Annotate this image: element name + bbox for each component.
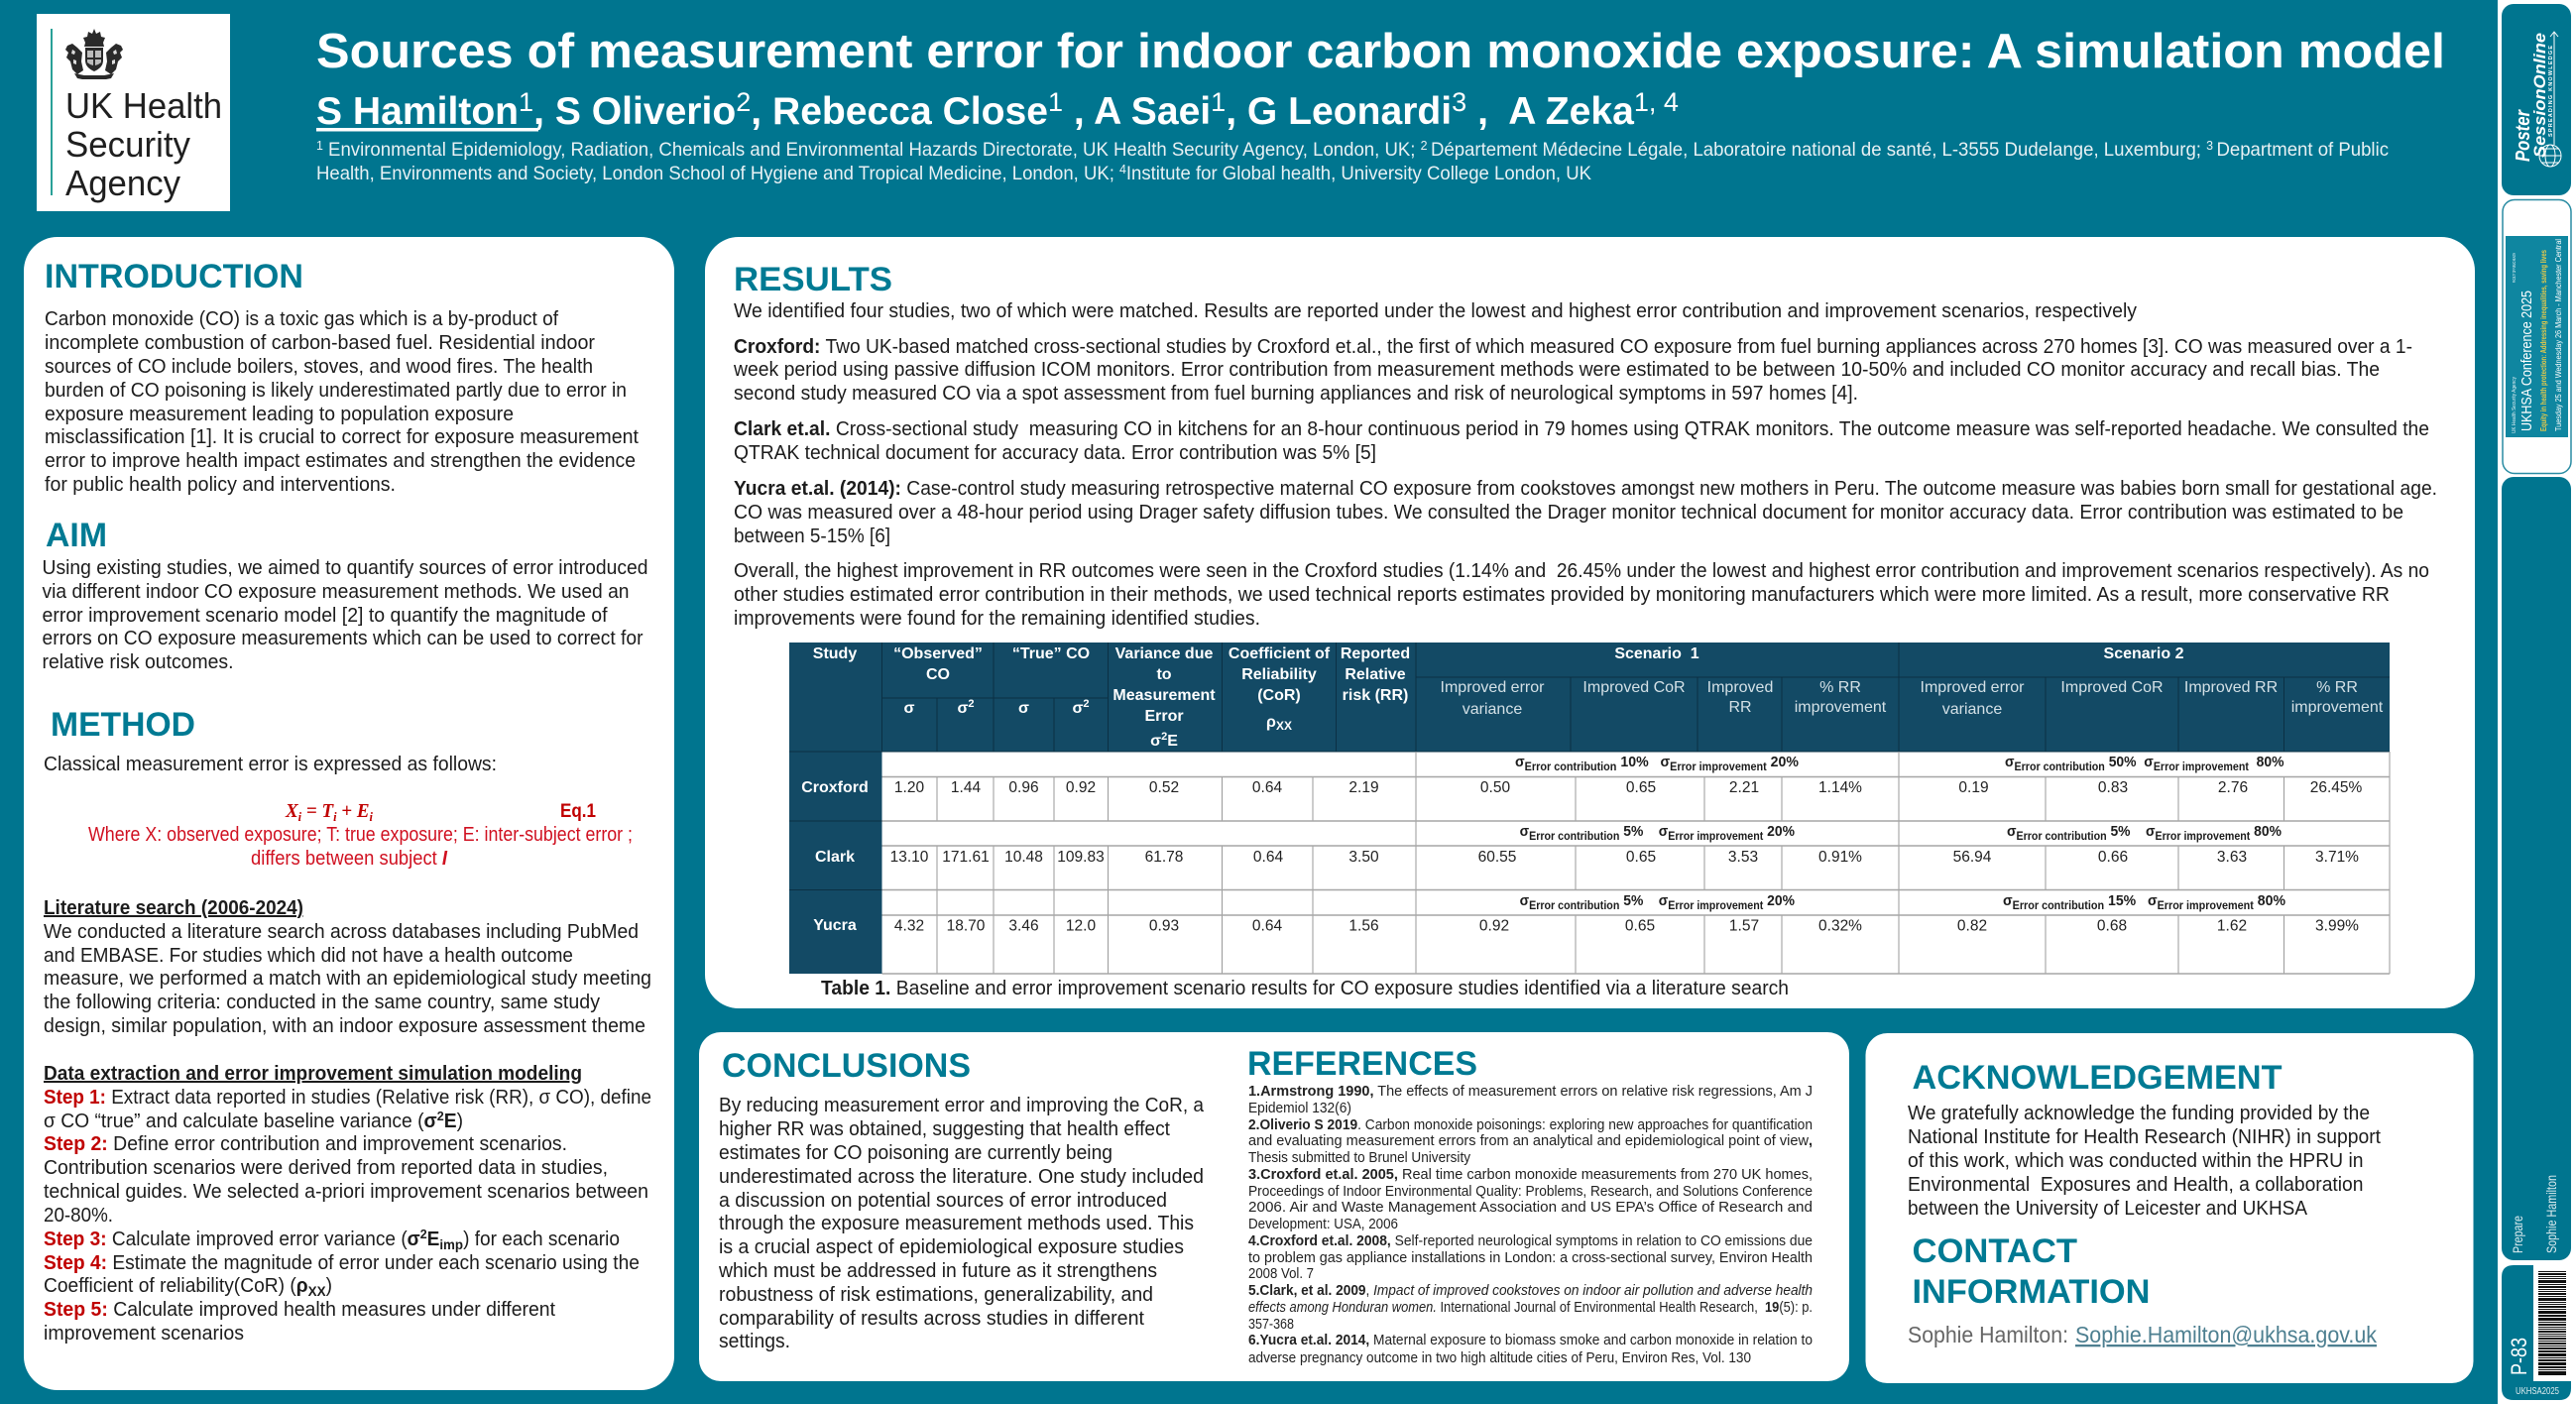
table header: baseline columns: (CoR) — [1257, 687, 1301, 704]
text block: simulation steps: Step 1: Extract data reported in studies (Relative risk (RR), σ CO), define — [44, 1087, 651, 1109]
text block: references: effects among Honduran women. International Journal of Environmental Health Research, 19(5): p. — [1248, 1300, 1813, 1316]
affiliations: Département Médecine Légale, Laboratoire national de santé, L-3555 Dudelange, Luxemburg; — [1431, 139, 2206, 161]
text block: contact email: Sophie Hamilton: — [1908, 1322, 2068, 1347]
table row: Croxford: 0.65 — [1626, 779, 1656, 796]
table header: scenario columns: variance — [1942, 701, 2002, 718]
table row: Clark: 5% σ — [2107, 823, 2155, 840]
table header: baseline columns: Relative — [1345, 666, 1406, 683]
table header: scenario columns: Improved error — [1441, 679, 1545, 696]
table row: Croxford: 1.44 — [951, 779, 981, 796]
table header: baseline columns: Study — [813, 645, 857, 662]
table row: Yucra: 0.93 — [1149, 918, 1179, 934]
text block: literature search: We conducted a literature search across databases including PubMed — [44, 921, 639, 943]
text block: classical error: Classical measurement error is expressed as follows: — [44, 754, 497, 775]
equation 1: + E — [337, 800, 370, 822]
heading: introduction: INTRODUCTION — [45, 258, 303, 295]
table row: Yucra: 1.62 — [2217, 918, 2247, 934]
heading: results: RESULTS — [734, 261, 892, 298]
text block: Clark: Clark et.al. Cross-sectional study measuring CO in kitchens for an 8-hour continuous period in 79 homes using QTRAK monitors. The outcome measure was self-reported headache. We consulted the — [734, 418, 2429, 440]
table header: baseline columns: Reported — [1341, 645, 1410, 662]
authors: , A Zeka — [1466, 90, 1634, 133]
table row: Yucra: Error improvement — [2158, 900, 2254, 912]
badge: UKHSA Conference banner: UKHSA Conference 2025 — [2518, 291, 2535, 431]
heading: contact information: CONTACT — [1912, 1232, 2077, 1270]
affiliations — [316, 138, 2389, 184]
text block: simulation steps: ) for each scenario — [463, 1228, 620, 1250]
table row: Yucra: 15% σ — [2104, 892, 2158, 909]
table header: scenario columns: improvement — [2291, 699, 2384, 716]
text block: simulation steps: Step 4: Estimate the magnitude of error under each scenario using the — [44, 1252, 640, 1274]
logo: UK Health Security Agency — [37, 14, 230, 211]
table row: Croxford: 2.21 — [1729, 779, 1759, 796]
text block: references — [1248, 1084, 1813, 1366]
badge: Poster Session Online — [2502, 4, 2571, 195]
text block: introduction: incomplete combustion of carbon-based fuel. Residential indoor — [45, 332, 595, 354]
table row: Croxford: 50% σ — [2105, 754, 2154, 770]
equation 1: X — [286, 800, 298, 822]
table header: scenario columns: Scenario 2 — [2104, 645, 2184, 662]
text block: Croxford: week period using passive diffusion ICOM monitors. Error contribution from measurement methods were estimated to be between 10-50% and included CO monitor accuracy and recall bias. The — [733, 359, 2380, 381]
table row: Croxford: 0.50 — [1480, 779, 1510, 796]
equation 1: i — [333, 809, 337, 824]
table row: Clark: 0.91% — [1818, 849, 1862, 866]
text block: references: 2008 Vol. 7 — [1248, 1266, 1314, 1282]
table row: Croxford: 2.19 — [1348, 779, 1379, 796]
authors: S Hamilton — [316, 90, 519, 133]
text block: references: Epidemiol 132(6) — [1248, 1101, 1351, 1116]
badge: poster number and barcode — [2502, 1265, 2571, 1400]
table row: Clark: 109.83 — [1057, 849, 1105, 866]
table header: baseline columns: Variance due — [1115, 645, 1213, 662]
text block: simulation steps — [44, 1063, 651, 1345]
table row: Croxford: 0.19 — [1958, 779, 1989, 796]
table row: Clark: σ — [1520, 823, 1530, 840]
equation 1: Eq.1 — [560, 801, 596, 822]
table row: Croxford: 10% σ — [1616, 754, 1670, 770]
authors: 3 — [1452, 87, 1466, 117]
text block: simulation steps: Coefficient of reliability(CoR) (ρ — [44, 1275, 308, 1297]
table row: Clark: 0.64 — [1253, 849, 1283, 866]
text block: aim — [42, 557, 648, 673]
table header: baseline columns: σ — [1018, 700, 1029, 717]
equation 1: Where X: observed exposure; T: true exposure; E: inter-subject error ; — [88, 824, 633, 846]
authors: 1 — [519, 87, 533, 117]
table row: Yucra: 3.46 — [1008, 918, 1039, 934]
side strip — [2498, 0, 2576, 1404]
table row: Clark: 80% — [2250, 823, 2282, 840]
table row: Clark: 3.71% — [2315, 849, 2359, 866]
table header: scenario columns: % RR — [2316, 679, 2358, 696]
text block: Croxford — [733, 336, 2412, 405]
table header: scenario columns: Improved — [1707, 679, 1773, 696]
text block: overall: Overall, the highest improvement in RR outcomes were seen in the Croxford studies (1.14% and 26.45% under the lowest and highest error contribution and improvement scenarios respectively). As no — [734, 560, 2429, 582]
table header: scenario columns: % RR — [1819, 679, 1861, 696]
logo: UK Health Security Agency: UK Health — [65, 85, 222, 126]
table header: scenario columns: Improved RR — [2184, 679, 2278, 696]
table row: Yucra: Error contribution — [2013, 900, 2104, 912]
text block: conclusions: is a crucial aspect of epidemiological exposure studies — [719, 1236, 1184, 1258]
affiliations: 3 — [2206, 138, 2216, 153]
equation 1: = T — [301, 800, 334, 822]
text block: simulation steps: Step 5: Calculate improved health measures under different — [44, 1299, 555, 1321]
table row: Croxford: 20% — [1767, 754, 1799, 770]
table row: Yucra: 4.32 — [894, 918, 924, 934]
table row: Clark: 3.63 — [2217, 849, 2247, 866]
table row: Yucra: 0.92 — [1479, 918, 1509, 934]
text block: conclusions: underestimated across the literature. One study included — [719, 1166, 1204, 1188]
text block: conclusions: higher RR was obtained, suggesting that health effect — [719, 1118, 1170, 1140]
text block: simulation steps: ) — [326, 1275, 332, 1297]
badge: presenter: Prepare — [2510, 1216, 2525, 1253]
text block: simulation steps: 2 — [437, 1109, 444, 1123]
logo: UK Health Security Agency: Agency — [65, 163, 180, 203]
table row: Yucra: 0.64 — [1252, 918, 1282, 934]
table row: Clark: 13.10 — [890, 849, 929, 866]
table header: baseline columns: “Observed” — [893, 645, 983, 662]
text block: contact email — [1908, 1322, 2377, 1347]
authors: , A Saei — [1063, 90, 1211, 133]
icon: globe and arrow — [2539, 32, 2561, 167]
affiliations: 1 — [316, 138, 323, 153]
table row: Croxford: Error improvement — [1670, 761, 1767, 773]
text block: simulation steps: Step 3: Calculate improved error variance (σ — [44, 1228, 421, 1250]
text block: Clark — [734, 418, 2429, 464]
table row: Clark: 3.50 — [1348, 849, 1379, 866]
equation 1: i — [370, 809, 373, 824]
badge: UKHSA Conference banner: FACULTY OF PUBLIC HEALTH — [2512, 253, 2517, 283]
table row: Clark: 20% — [1763, 823, 1795, 840]
panel: introduction, aim, method — [24, 237, 674, 1390]
text block: aim: via different indoor CO exposure measurement methods. We used an — [42, 581, 629, 603]
text block: overall — [734, 560, 2429, 630]
table row: Croxford: Croxford — [801, 779, 869, 796]
table row: Yucra — [813, 892, 2359, 934]
text block: simulation steps: E — [427, 1228, 439, 1250]
table row: Clark: 171.61 — [942, 849, 990, 866]
badge: Poster Session Online: SessionOnline — [2530, 33, 2549, 158]
table row: Yucra: 1.57 — [1729, 918, 1759, 934]
text block: simulation steps: 2 — [420, 1227, 427, 1241]
table row: Croxford: 80% — [2249, 754, 2284, 770]
text block: simulation steps: σ CO “true” and calculate baseline variance (σ — [44, 1111, 438, 1132]
table row: Yucra: 5% σ — [1619, 892, 1668, 909]
text block: introduction: for public health policy and interventions. — [45, 474, 396, 496]
text block: introduction: misclassification [1]. It is crucial to correct for exposure measurement — [45, 426, 639, 448]
authors: 1 — [1048, 87, 1063, 117]
table header: baseline columns: ρ — [1266, 714, 1276, 731]
table row: Clark: 0.66 — [2098, 849, 2128, 866]
table row: Croxford: 0.64 — [1252, 779, 1282, 796]
heading: conclusions: CONCLUSIONS — [722, 1047, 971, 1085]
text block: conclusions: robustness of risk estimations, generalizability, and — [719, 1284, 1153, 1306]
table row: Yucra: 0.68 — [2097, 918, 2127, 934]
table header: baseline columns: 2 — [968, 698, 975, 710]
authors: , S Oliverio — [533, 90, 736, 133]
table row: Clark: 0.65 — [1626, 849, 1656, 866]
text block: literature search: measure, we performed a match with an epidemiological study meeting — [44, 968, 651, 990]
table header: baseline columns: to — [1156, 666, 1172, 683]
table row: Clark: 60.55 — [1478, 849, 1516, 866]
table header: scenario columns — [1441, 645, 2384, 718]
text block: aim: errors on CO exposure measurements which can be used to correct for — [42, 628, 644, 649]
title: Sources of measurement error for indoor carbon monoxide exposure: A simulation model — [316, 25, 2445, 78]
table caption: Table 1. Baseline and error improvement scenario results for CO exposure studies identified via a literature search — [821, 978, 1789, 999]
text block: references: 4.Croxford et.al. 2008, Self-reported neurological symptoms in relation to CO emissions due — [1248, 1233, 1813, 1249]
text block: Yucra: CO was measured over a 48-hour period using Drager safety diffusion tubes. We consulted the Drager monitor technical document for monitor accuracy data. Error contribution was estimated to be — [734, 502, 2403, 524]
text block: acknowledgement: between the University of Leicester and UKHSA — [1908, 1198, 2308, 1220]
text block: aim: Using existing studies, we aimed to quantify sources of error introduced — [42, 557, 648, 579]
text block: references: 1.Armstrong 1990, The effects of measurement errors on relative risk regressions, Am J — [1248, 1084, 1813, 1100]
authors: 2 — [736, 87, 751, 117]
equation 1: i — [298, 809, 301, 824]
table row: Yucra: 12.0 — [1066, 918, 1096, 934]
table header: baseline columns: Reliability — [1241, 666, 1317, 683]
text block: simulation steps: Step 2: Define error contribution and improvement scenarios. — [44, 1133, 567, 1155]
table row: Yucra: 0.65 — [1625, 918, 1655, 934]
badge: Poster Session Online: Poster — [2513, 109, 2534, 162]
table row: Clark: 3.53 — [1728, 849, 1758, 866]
authors — [316, 87, 1679, 133]
table header: baseline columns: σ — [1150, 733, 1161, 750]
badge: poster number and barcode: UKHSA2025 — [2516, 1385, 2559, 1397]
text block: conclusions: By reducing measurement error and improving the CoR, a — [719, 1095, 1205, 1116]
authors: , Rebecca Close — [751, 90, 1048, 133]
table row: Clark: Error contribution — [2017, 831, 2107, 843]
panel: results — [705, 237, 2475, 1008]
table row: Croxford: Error contribution — [1525, 761, 1616, 773]
text block: references: adverse pregnancy outcome in two high altitude cities of Peru, Environ Res, Vol. 130 — [1248, 1350, 1751, 1366]
text block: results summary: We identified four studies, two of which were matched. Results are reported under the lowest and highest error contribution and improvement scenarios, respectively — [734, 300, 2137, 322]
table row: Croxford: σ — [2005, 754, 2015, 770]
table header: baseline columns: Coefficient of — [1229, 645, 1331, 662]
table header: baseline columns: Measurement — [1112, 687, 1216, 704]
table row: Croxford: 0.83 — [2098, 779, 2128, 796]
badge: Poster Session Online: SPREADING KNOWLEDGE — [2548, 46, 2554, 137]
table row: Clark: Error contribution — [1529, 831, 1619, 843]
table header: scenario columns: Improved error — [1921, 679, 2025, 696]
table row: Croxford: 0.96 — [1008, 779, 1039, 796]
table row: Yucra: σ — [1520, 892, 1530, 909]
table row: Yucra: 18.70 — [947, 918, 986, 934]
table header: baseline columns — [813, 645, 1410, 750]
badge: poster number and barcode: P-83 — [2507, 1338, 2531, 1375]
heading: references: REFERENCES — [1247, 1045, 1477, 1083]
table header: scenario columns: variance — [1463, 701, 1522, 718]
text block: overall: improvements were found for the remaining identified studies. — [734, 608, 1260, 630]
text block: Croxford: Croxford: Two UK-based matched cross-sectional studies by Croxford et.al., the first of which measured CO exposure from fuel burning appliances across 270 homes [3]. CO was measured over a 1- — [734, 336, 2412, 358]
text block: Clark: QTRAK technical document for accuracy data. Error contribution was 5% [5] — [734, 442, 1376, 464]
table header: baseline columns: σ — [904, 700, 915, 717]
icon: royal crest — [65, 29, 123, 79]
badge: UKHSA Conference banner — [2503, 200, 2571, 474]
table header: scenario columns: Improved CoR — [2060, 679, 2164, 696]
table row: Croxford: 0.52 — [1149, 779, 1179, 796]
text block: introduction: sources of CO include boilers, stoves, and wood fires. The health — [45, 356, 593, 378]
affiliations: 2 — [1421, 138, 1431, 153]
table row: Croxford: 2.76 — [2218, 779, 2248, 796]
text block: contact email: Sophie.Hamilton@ukhsa.gov.uk — [2075, 1322, 2377, 1347]
table row: Croxford: Error improvement — [2154, 761, 2249, 773]
text block: references: to problem gas appliance installations in London: a cross-sectional survey, Environ Health — [1248, 1250, 1813, 1266]
table header: baseline columns: E — [1167, 733, 1178, 750]
logo: UK Health Security Agency: Security — [65, 124, 190, 165]
authors: , G Leonardi — [1226, 90, 1452, 133]
table header: baseline columns: Error — [1144, 708, 1184, 725]
heading: contact information — [1912, 1232, 2150, 1311]
text block: references: 5.Clark, et al. 2009, Impact of improved cookstoves on indoor air pollution and adverse health — [1248, 1283, 1813, 1299]
affiliations: Department of Public — [2216, 139, 2389, 161]
text block: literature search — [44, 897, 651, 1037]
text block: simulation steps: imp — [439, 1236, 463, 1252]
affiliations: Health, Environments and Society, London School of Hygiene and Tropical Medicine, London, UK; — [316, 163, 1155, 184]
text block: conclusions: a discussion on potential sources of error introduced — [719, 1190, 1167, 1212]
table row: Clark: 10.48 — [1004, 849, 1043, 866]
panel: acknowledgement and contact — [1866, 1033, 2473, 1383]
table row: Croxford — [801, 754, 2362, 796]
table row: Yucra: Yucra — [813, 917, 857, 934]
text block: simulation steps: technical guides. We selected a-priori improvement scenarios between — [44, 1181, 648, 1203]
text block: literature search: the following criteria: conducted in the same country, same study — [44, 992, 600, 1013]
icon: barcode — [2538, 1271, 2566, 1375]
text block: references: 6.Yucra et.al. 2014, Maternal exposure to biomass smoke and carbon monoxide in relation to — [1248, 1333, 1813, 1348]
table row: Clark: Error improvement — [2155, 831, 2250, 843]
text block: simulation steps: ) — [457, 1111, 463, 1132]
table header: baseline columns: σ — [1072, 700, 1083, 717]
text block: conclusions: estimates for CO poisoning are currently being — [719, 1142, 1112, 1164]
heading: contact information: INFORMATION — [1912, 1273, 2150, 1311]
affiliations: 4 — [1119, 162, 1126, 176]
equation 1 — [88, 800, 633, 870]
text block: introduction: Carbon monoxide (CO) is a toxic gas which is a by-product of — [45, 308, 558, 330]
text block: introduction — [45, 308, 639, 496]
badge: UKHSA Conference banner: Tuesday 25 and Wednesday 26 March - Manchester Central — [2553, 239, 2563, 431]
text block: Yucra — [734, 478, 2437, 547]
affiliations: Environmental Epidemiology, Radiation, Chemicals and Environmental Hazards Directorate, UK Health Security Agency, London, UK; — [323, 139, 1421, 161]
text block: simulation steps: improvement scenarios — [44, 1323, 244, 1345]
text block: simulation steps: XX — [308, 1283, 326, 1299]
table row: Yucra: 0.32% — [1818, 918, 1862, 934]
heading: aim: AIM — [46, 517, 107, 554]
text block: references: 3.Croxford et.al. 2005, Real time carbon monoxide measurements from 270 UK homes, — [1248, 1167, 1813, 1183]
text block: simulation steps: Data extraction and error improvement simulation modeling — [44, 1063, 582, 1085]
table header: baseline columns: σ — [957, 700, 968, 717]
text block: overall: other studies estimated error contribution in their methods, we used technical reports estimates provided by monitoring manufacturers which were more limited. As a result, more conservative RR — [734, 584, 2390, 606]
text block: simulation steps: E — [444, 1111, 457, 1132]
table header: baseline columns: CO — [926, 666, 950, 683]
text block: literature search: design, similar population, with an indoor exposure assessment theme — [44, 1015, 645, 1037]
table row: Croxford: 0.92 — [1066, 779, 1096, 796]
affiliations: Institute for Global health, University College London, UK — [1126, 163, 1591, 184]
text block: acknowledgement: We gratefully acknowledge the funding provided by the — [1908, 1103, 2370, 1124]
table row: Croxford: σ — [1515, 754, 1525, 770]
badge: UKHSA Conference banner: UK Health Security Agency — [2512, 377, 2517, 433]
text block: acknowledgement: of this work, which was conducted within the HPRU in — [1908, 1150, 2364, 1172]
text block: introduction: error to improve health impact estimates and strengthen the evidence — [45, 450, 636, 472]
table row: Clark — [815, 823, 2359, 866]
equation 1: differs between subject I — [251, 848, 447, 870]
text block: conclusions: comparability of results across studies in different — [719, 1308, 1144, 1330]
table row: Yucra: Error improvement — [1668, 900, 1763, 912]
table row: Croxford: 1.14% — [1818, 779, 1862, 796]
text block: conclusions — [718, 1095, 1205, 1352]
table header: baseline columns: 2 — [1161, 731, 1167, 743]
table header: baseline columns: “True” CO — [1012, 645, 1090, 662]
text block: simulation steps: Contribution scenarios were derived from reported data in studies, — [44, 1157, 608, 1179]
text block: aim: error improvement scenario model [2] to quantify the magnitude of — [42, 605, 608, 627]
text block: introduction: exposure measurement leading to population exposure — [45, 404, 514, 425]
text block: aim: relative risk outcomes. — [42, 651, 234, 673]
table header: scenario columns: RR — [1728, 699, 1752, 716]
text block: conclusions: which must be addressed in future as it strengthens — [718, 1260, 1157, 1282]
table row: Yucra: 0.82 — [1957, 918, 1987, 934]
table header: scenario columns: Improved CoR — [1582, 679, 1686, 696]
text block: references: and evaluating measurement errors from an analytical and epidemiological point of view, — [1248, 1133, 1813, 1149]
text block: literature search: and EMBASE. For studies which did not have a health outcome — [44, 945, 573, 967]
text block: introduction: burden of CO poisoning is likely underestimated partly due to error in — [45, 380, 627, 402]
heading: method: METHOD — [51, 706, 195, 744]
text block: acknowledgement — [1908, 1103, 2381, 1220]
badge: UKHSA Conference banner: Equity in health protection: Addressing inequalities, saving lives — [2539, 250, 2548, 431]
table row: Clark: 61.78 — [1145, 849, 1183, 866]
text block: simulation steps: 20-80%. — [44, 1205, 113, 1227]
text block: references: Proceedings of Indoor Environmental Quality: Problems, Research, and Solutions Conference — [1248, 1184, 1813, 1200]
table row: Yucra: Error contribution — [1529, 900, 1619, 912]
authors: 1, 4 — [1634, 87, 1679, 117]
table row: Clark: Error improvement — [1668, 831, 1763, 843]
badge: presenter: Sophie Hamilton — [2543, 1175, 2559, 1253]
badge: presenter — [2502, 477, 2571, 1260]
text block: Yucra: between 5-15% [6] — [734, 526, 890, 547]
text block: references: Development: USA, 2006 — [1248, 1217, 1398, 1232]
table row: Clark: 5% σ — [1619, 823, 1668, 840]
text block: Yucra: Yucra et.al. (2014): Case-control study measuring retrospective maternal CO exposure from cookstoves amongst new mothers in Peru. The outcome measure was babies born small for gestational age. — [734, 478, 2437, 500]
table row: Yucra: 1.56 — [1348, 918, 1379, 934]
text block: acknowledgement: National Institute for Health Research (NIHR) in support — [1908, 1126, 2381, 1148]
table row: Clark: Clark — [815, 849, 855, 866]
table row: Yucra: 20% — [1763, 892, 1795, 909]
authors: 1 — [1211, 87, 1226, 117]
table row: Yucra: 80% — [2254, 892, 2285, 909]
table row: Yucra: 3.99% — [2315, 918, 2359, 934]
text block: references: 2.Oliverio S 2019. Carbon monoxide poisonings: exploring new approaches for quantification — [1248, 1117, 1813, 1133]
table row: Clark: σ — [2007, 823, 2017, 840]
table header: baseline columns: risk (RR) — [1343, 687, 1408, 704]
table: baseline and scenario results — [789, 643, 2390, 974]
text block: literature search: Literature search (2006-2024) — [44, 897, 303, 919]
text block: references: Thesis submitted to Brunel University — [1248, 1150, 1471, 1166]
table header: scenario columns: Scenario 1 — [1614, 645, 1699, 662]
table row: Croxford: 1.20 — [894, 779, 924, 796]
text block: acknowledgement: Environmental Exposures and Health, a collaboration — [1908, 1174, 2364, 1196]
text block: conclusions: through the exposure measurement methods used. This — [719, 1213, 1194, 1234]
text block: references: 2006. Air and Waste Management Association and US EPA’s Office of Research and — [1248, 1200, 1813, 1216]
text block: references: 357-368 — [1248, 1317, 1294, 1333]
text block: Croxford: second study measured CO via a spot assessment from fuel burning appliances and risk of neurological symptoms in 597 homes [4]. — [734, 383, 1858, 405]
table row: Yucra: σ — [2003, 892, 2013, 909]
table header: baseline columns: 2 — [1083, 698, 1090, 710]
table row: Clark: 56.94 — [1953, 849, 1992, 866]
table header: scenario columns: improvement — [1795, 699, 1887, 716]
table row: Croxford: Error contribution — [2015, 761, 2105, 773]
table header: baseline columns: XX — [1276, 719, 1292, 733]
text block: conclusions: settings. — [719, 1331, 790, 1352]
heading: acknowledgement: ACKNOWLEDGEMENT — [1912, 1059, 2283, 1097]
panel: conclusions and references — [699, 1032, 1849, 1381]
table row: Croxford: 26.45% — [2310, 779, 2362, 796]
